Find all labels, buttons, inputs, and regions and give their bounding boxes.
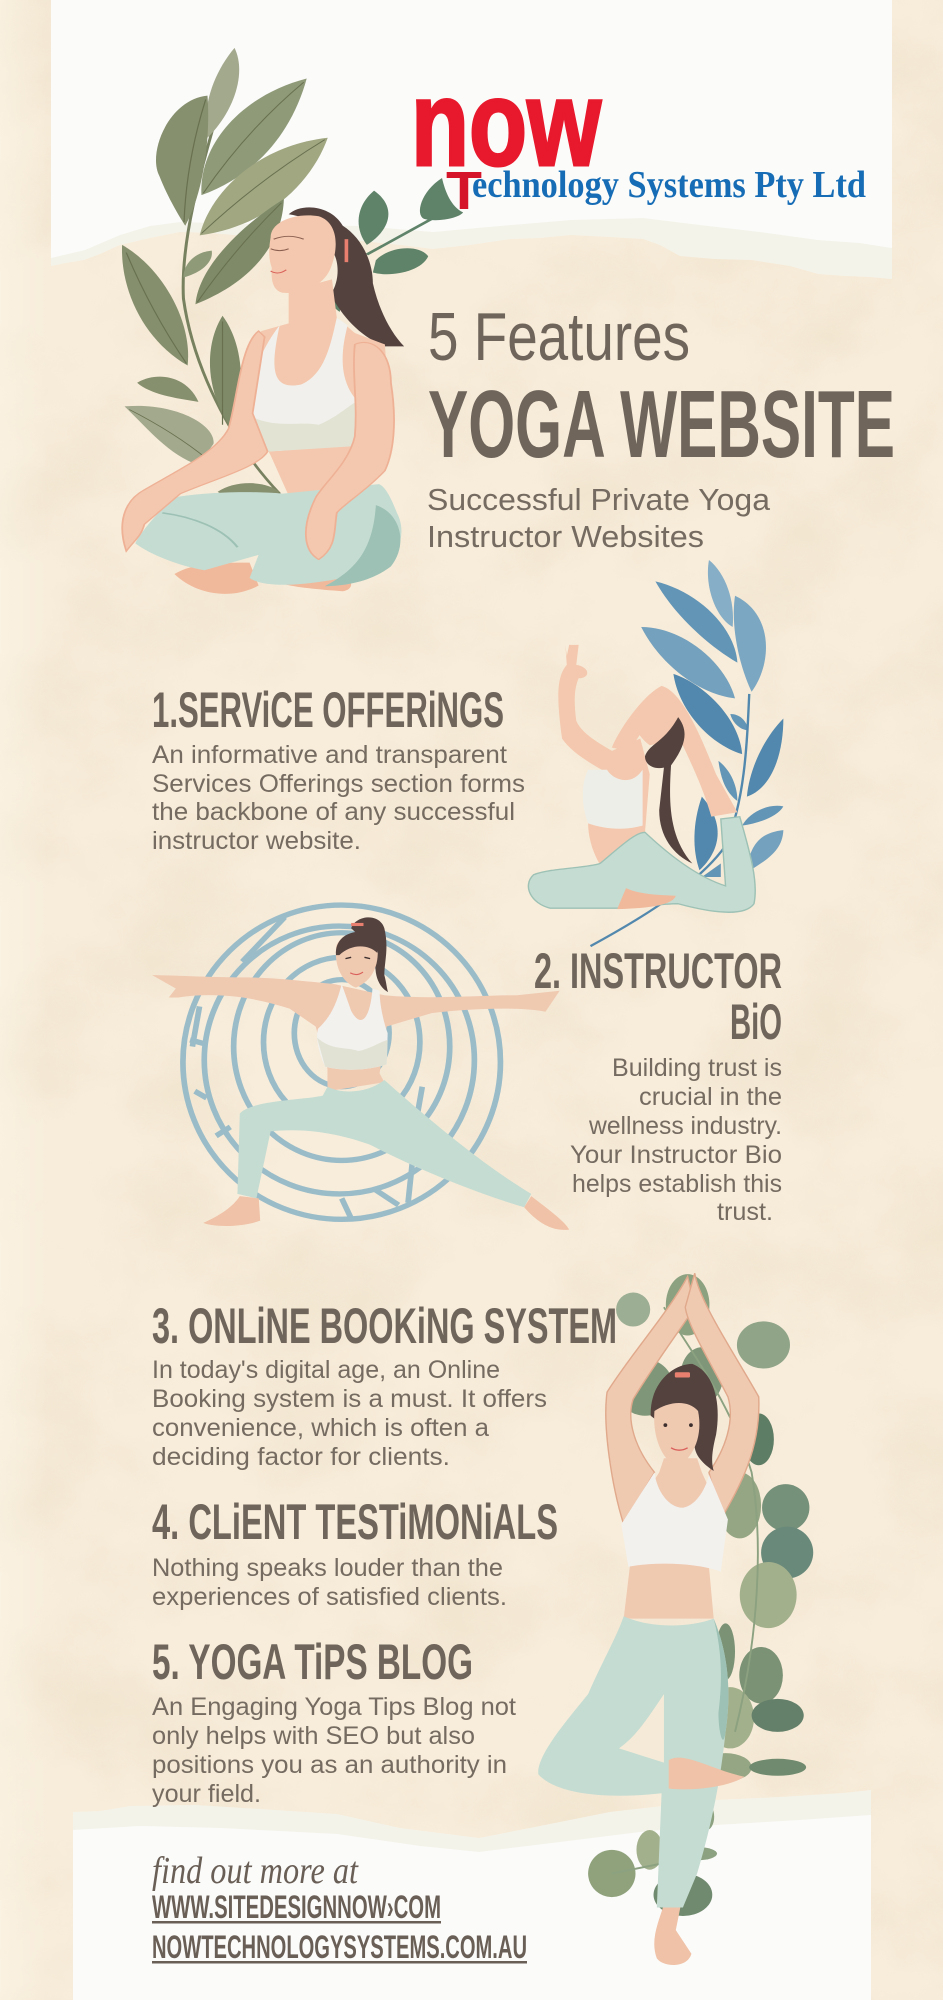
body 1: the backbone of any successful [152,798,515,826]
logo: now Technology Systems [411,55,866,221]
sports top [621,1472,728,1571]
heading 2: 2. INSTRUCTOR [534,943,782,999]
body 2: helps establish this [572,1170,782,1198]
arms behind head and head [612,686,737,817]
heading 2: BiO [730,994,782,1050]
logo word: Technology Systems Pty Ltd: echnology Systems Pty Ltd [472,164,866,206]
hair [645,717,692,864]
hair back [651,1364,718,1471]
face [269,215,336,293]
body 1 [152,741,525,855]
panel: torn white paper header [51,0,892,279]
link: sitedesignnow: WWW.SITEDESIGNNOW›COM [152,1889,441,1925]
heading 3: 3. ONLiNE BOOKiNG SYSTEM [152,1298,617,1354]
body 4: experiences of satisfied clients. [152,1583,507,1611]
ponytail [351,917,388,992]
body 2 [570,1054,782,1226]
section 3: online booking system [152,1298,617,1471]
body 3: deciding factor for clients. [152,1443,450,1471]
hair tie [345,239,348,262]
logo word: now: now [411,55,602,191]
illustration: warrior pose with blue circle [152,905,569,1230]
section 4: client testimonials [152,1494,558,1611]
sports top [317,984,388,1070]
leggings [135,484,401,586]
blue leaves [590,560,783,946]
heading 2 [534,943,782,1050]
sports top [250,318,359,452]
section 5: yoga tips blog [152,1634,516,1808]
footer links [152,1850,527,1965]
arms [122,331,394,560]
body 2: trust. [717,1198,773,1226]
body 3 [152,1356,547,1471]
face [654,1403,699,1467]
leggings [237,1080,531,1207]
body 2: crucial in the [639,1083,782,1111]
raised arm and hand [558,645,645,783]
subtitle [427,482,771,554]
fringe and face [336,923,379,975]
sports top [583,770,643,829]
body 5: only helps with SEO but also [152,1722,475,1750]
olive leaves [122,48,328,502]
torso and neck [624,1458,726,1619]
subtitle: Successful Private Yoga [427,482,771,517]
arms raised [606,1273,759,1524]
body 5 [152,1693,516,1808]
leggings [528,817,755,912]
eucalyptus leaves [588,1274,813,1916]
ponytail and hair back [289,207,404,346]
concentric blue rings [183,905,500,1219]
body 3: In today's digital age, an Online [152,1356,500,1384]
torso [588,739,650,868]
body 4: Nothing speaks louder than the [152,1554,503,1582]
face details [663,1372,693,1450]
heading 4: 4. CLiENT TESTiMONiALS [152,1494,558,1550]
foot [617,888,676,909]
section 2: instructor bio [534,943,782,1226]
leggings [538,1616,728,1907]
feet [174,563,351,594]
illustration: tree pose with eucalyptus leaves [538,1273,813,1965]
torso and neck [248,279,391,496]
raised foot [669,1758,745,1789]
logo word: Technology Systems Pty Ltd [446,161,866,221]
panel: torn white paper footer [73,1790,871,2000]
body 2: wellness industry. [588,1112,782,1140]
body 2: Your Instructor Bio [570,1141,782,1169]
body 2: Building trust is [612,1054,782,1082]
face details [271,236,304,273]
body 5: positions you as an authority in [152,1751,507,1779]
illustration: meditating woman with olive leaves [122,48,463,594]
body 3: Booking system is a must. It offers [152,1385,547,1413]
subtitle: Instructor Websites [427,519,704,554]
link: nowtechnologysystems: NOWTECHNOLOGYSYSTEMS.COM.AU [152,1929,527,1965]
head [336,935,378,988]
body 3: convenience, which is often a [152,1414,489,1442]
find out more: find out more at [152,1850,359,1892]
title: 5 Features: 5 Features [428,299,690,375]
section 1: service offerings [152,682,525,855]
logo word: Technology Systems Pty Ltd: T [446,161,482,221]
heading 5: 5. YOGA TiPS BLOG [152,1634,473,1690]
body 5: your field. [152,1780,261,1808]
body 1: Services Offerings section forms [152,770,525,798]
body 4 [152,1554,507,1611]
arms and torso [152,975,560,1091]
back leaves dark green [329,178,463,312]
body 5: An Engaging Yoga Tips Blog not [152,1693,516,1721]
feet [203,1196,569,1230]
illustration: backbend pose with blue leaves [528,560,783,946]
body 1: An informative and transparent [152,741,507,769]
heading 1: 1.SERViCE OFFERiNGS [152,682,504,738]
standing foot [654,1904,691,1965]
body 1: instructor website. [152,827,361,855]
